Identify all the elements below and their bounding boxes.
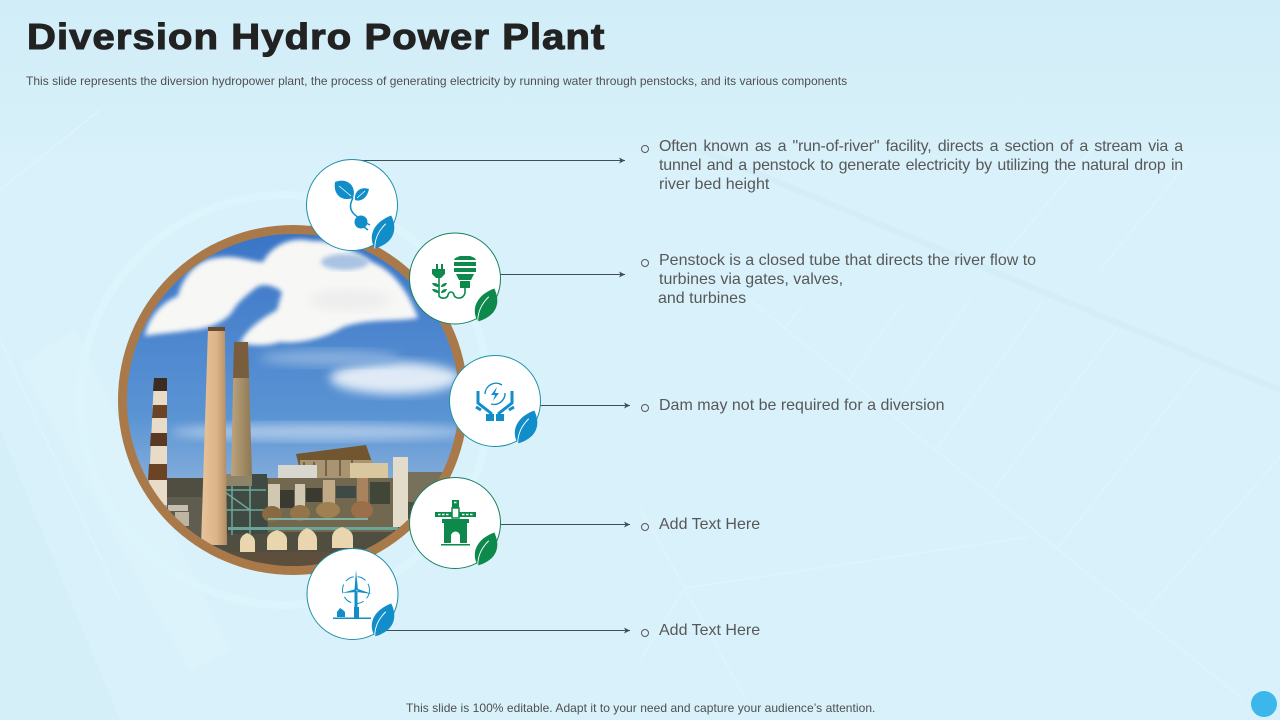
icon circle 5: wind turbine: [307, 548, 398, 640]
icon circle 4: windmill building: [410, 478, 500, 568]
icon circle 2: plug and bulb: [410, 233, 500, 324]
diagram: photo and icon circles: [118, 158, 630, 640]
clouds: [145, 240, 418, 345]
text block 3: Dam may not be required for a diversion: [659, 397, 944, 414]
text block 2: turbines via gates, valves,: [659, 271, 843, 288]
subtitle: This slide represents the diversion hydropower plant, the process of generating electricity by running water through penstocks, and its various components: [26, 74, 847, 88]
connector arrows: [360, 160, 630, 630]
text block 2: [641, 252, 1036, 307]
icon circle 1: plant with plug: [306, 160, 398, 250]
title: Diversion Hydro Power Plant: [27, 16, 605, 57]
icon circle 3: hands with energy: [450, 356, 540, 446]
text block 1: Often known as a "run-of-river" facility, directs a section of a stream via a: [659, 138, 1183, 155]
factory: [167, 445, 442, 566]
chimneys: [201, 329, 227, 545]
footer note: This slide is 100% editable. Adapt it to your need and capture your audience’s attention.: [406, 701, 875, 715]
corner dot: [1251, 691, 1277, 717]
text block 1: [641, 138, 1184, 193]
text block 2: Penstock is a closed tube that directs the river flow to: [659, 252, 1036, 269]
text block 1: river bed height: [659, 176, 769, 193]
text block 1: tunnel and a penstock to generate electricity by utilizing the natural drop in: [659, 157, 1183, 174]
text block 5: Add Text Here: [659, 622, 760, 639]
photo: power plant in brown ring: [118, 225, 470, 575]
text block 4: Add Text Here: [659, 516, 760, 533]
text block 2: and turbines: [658, 290, 746, 307]
